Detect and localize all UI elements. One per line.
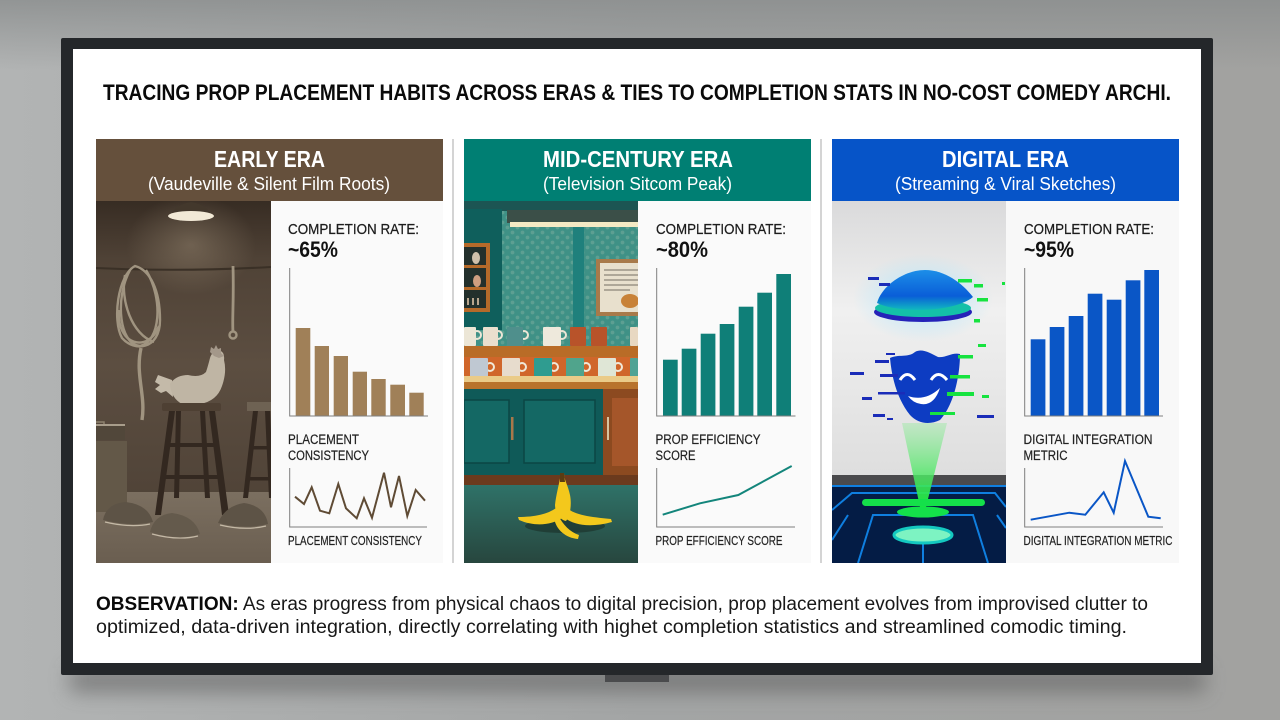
glitch fragments: [930, 279, 1005, 415]
chart caption: PROP EFFICIENCY SCORE: [656, 534, 782, 548]
completion rate: [288, 221, 419, 262]
framed picture: [596, 259, 639, 316]
cabinets: [464, 389, 638, 485]
upper mugs: [464, 327, 638, 346]
observation text: optimized, data-driven integration, directly correlating with highet completion statistics and streamlined comodic timing.: [96, 617, 1127, 638]
neon floor grid: [832, 486, 1006, 563]
illustration: holographic cap and comedy mask: [832, 201, 1006, 563]
early era header: EARLY ERA: [214, 146, 325, 172]
early era header: [96, 139, 443, 201]
screen surface: [73, 49, 1201, 663]
bar chart: [1025, 268, 1163, 416]
stats column: [638, 201, 811, 563]
coiled rope: [117, 266, 236, 420]
panel: early era: [96, 139, 443, 563]
digital era header: [832, 139, 1179, 201]
panel: mid-century era: [464, 139, 811, 563]
comedy mask: [890, 351, 960, 423]
green light cone: [902, 423, 947, 507]
digital era header: (Streaming & Viral Sketches): [895, 174, 1116, 194]
lamp: [168, 211, 214, 221]
line chart: [657, 466, 795, 527]
completion rate: COMPLETION RATE:: [288, 221, 419, 238]
completion rate: COMPLETION RATE:: [1024, 221, 1154, 238]
line chart: [290, 468, 427, 527]
second stool: [243, 402, 274, 498]
flat caps: [103, 502, 268, 538]
projector pads: [862, 499, 985, 543]
chicken: [155, 345, 225, 404]
stand tab: [605, 675, 669, 682]
digital era header: DIGITAL ERA: [942, 146, 1069, 172]
completion rate: ~80%: [656, 237, 708, 262]
completion rate: [1024, 221, 1154, 262]
line chart: [1025, 461, 1163, 527]
line chart title: METRIC: [1024, 448, 1068, 463]
banana peel: [518, 473, 612, 539]
chart caption: DIGITAL INTEGRATION METRIC: [1024, 534, 1172, 548]
mid-century header: (Television Sitcom Peak): [543, 174, 732, 194]
line chart title: SCORE: [656, 448, 696, 463]
early era header: (Vaudeville & Silent Film Roots): [148, 174, 390, 194]
bar chart: [290, 268, 428, 416]
holographic dome: [874, 270, 973, 322]
panel: digital era: [832, 139, 1179, 563]
completion rate: COMPLETION RATE:: [656, 221, 786, 238]
stool: [155, 403, 229, 515]
observation text: [96, 594, 1148, 638]
line chart title: DIGITAL INTEGRATION: [1024, 432, 1152, 447]
lower mugs: [470, 358, 638, 376]
illustration: vaudeville stage with rubber chicken on stool: [96, 195, 274, 563]
mid-century header: MID-CENTURY ERA: [543, 146, 733, 172]
line chart title: [288, 432, 369, 463]
stats column: [271, 201, 443, 563]
line chart title: PLACEMENT: [288, 432, 359, 447]
illustration: sitcom kitchen with mugs and banana peel: [464, 201, 639, 563]
chart caption: PLACEMENT CONSISTENCY: [288, 534, 423, 548]
observation text: OBSERVATION: As eras progress from physical chaos to digital precision, prop placement evolves from improvised clutter to: [96, 594, 1148, 615]
wall shelf: [464, 243, 490, 312]
line chart title: PROP EFFICIENCY: [656, 432, 760, 447]
line chart title: [656, 432, 760, 463]
completion rate: [656, 221, 786, 262]
line chart title: CONSISTENCY: [288, 448, 369, 463]
completion rate: ~65%: [288, 237, 338, 262]
line chart title: [1024, 432, 1152, 463]
stats column: [1006, 201, 1179, 563]
bar chart: [657, 268, 796, 416]
screen bezel: [61, 38, 1213, 675]
completion rate: ~95%: [1024, 237, 1074, 262]
bucket: [96, 422, 127, 512]
ceiling light: [507, 210, 638, 227]
mid-century header: [464, 139, 811, 201]
